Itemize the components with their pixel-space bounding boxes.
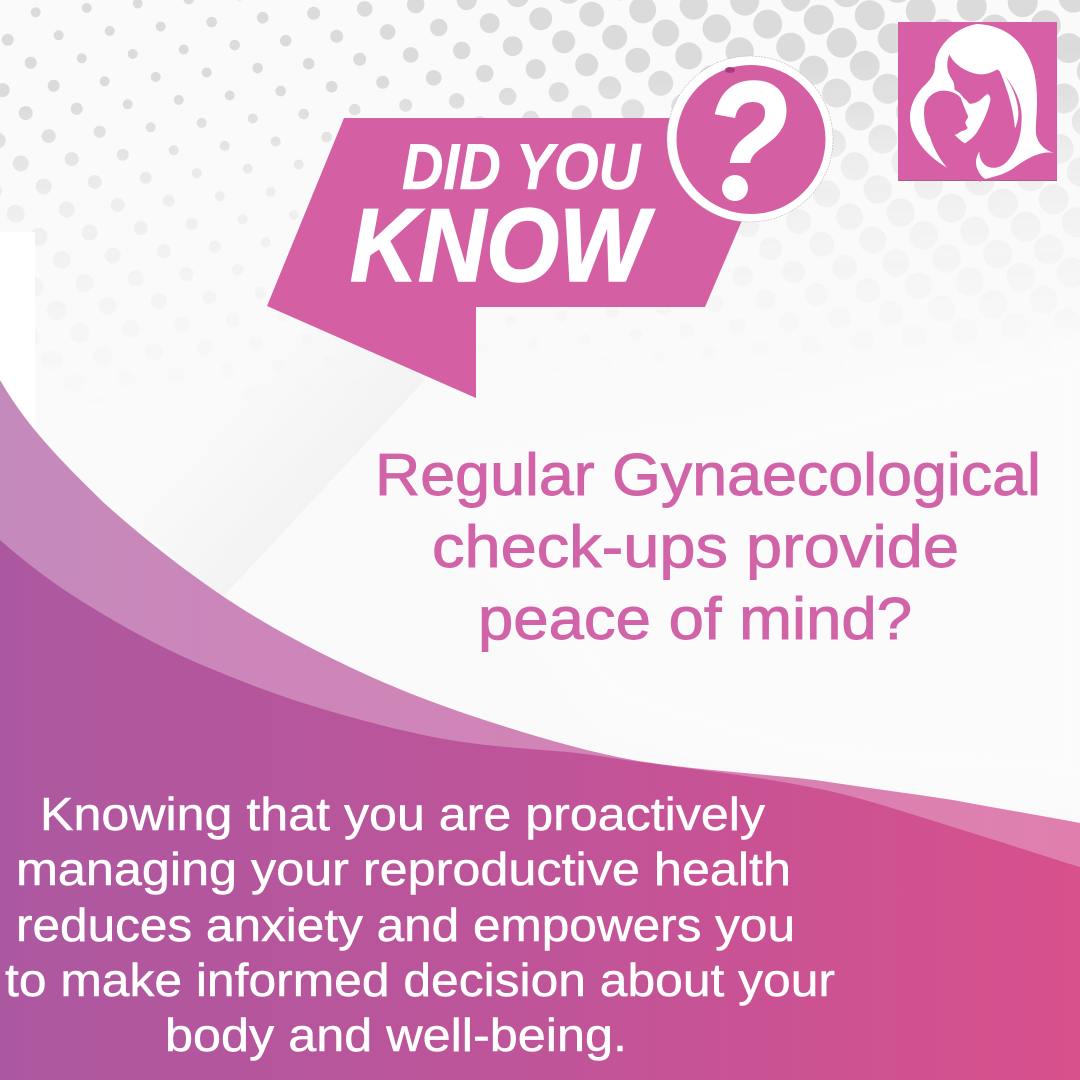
white strip at left edge bbox=[0, 232, 35, 432]
light wave band bbox=[0, 380, 1080, 1080]
body text: to make informed decision about your bbox=[5, 954, 835, 1006]
halftone dot pattern bbox=[0, 0, 1080, 254]
diagonal soft shadow bbox=[120, 290, 425, 600]
banner shape bbox=[267, 118, 755, 398]
did you know banner bbox=[267, 118, 755, 398]
heading: check-ups provide bbox=[432, 514, 959, 580]
logo: mother and baby bbox=[898, 22, 1057, 182]
banner text: did you: DID YOU bbox=[402, 130, 642, 203]
body text: managing your reproductive health bbox=[16, 843, 791, 895]
logo face and baby bbox=[924, 54, 1022, 182]
logo hair silhouette bbox=[910, 24, 1054, 179]
logo hair strand bbox=[999, 70, 1018, 128]
heading bbox=[375, 442, 1041, 652]
body text: reduces anxiety and empowers you bbox=[16, 899, 795, 951]
body text: body and well-being. bbox=[165, 1009, 627, 1061]
body text: Knowing that you are proactively bbox=[40, 788, 765, 840]
question mark badge bbox=[666, 56, 834, 222]
heading: peace of mind? bbox=[478, 586, 912, 652]
body text bbox=[5, 788, 835, 1061]
dark gradient wave bbox=[0, 540, 1080, 1080]
banner text: know: KNOW bbox=[350, 188, 655, 304]
question mark badge: ? bbox=[704, 47, 788, 235]
soft light wash, lower right bbox=[430, 330, 1080, 800]
heading: Regular Gynaecological bbox=[375, 442, 1041, 508]
